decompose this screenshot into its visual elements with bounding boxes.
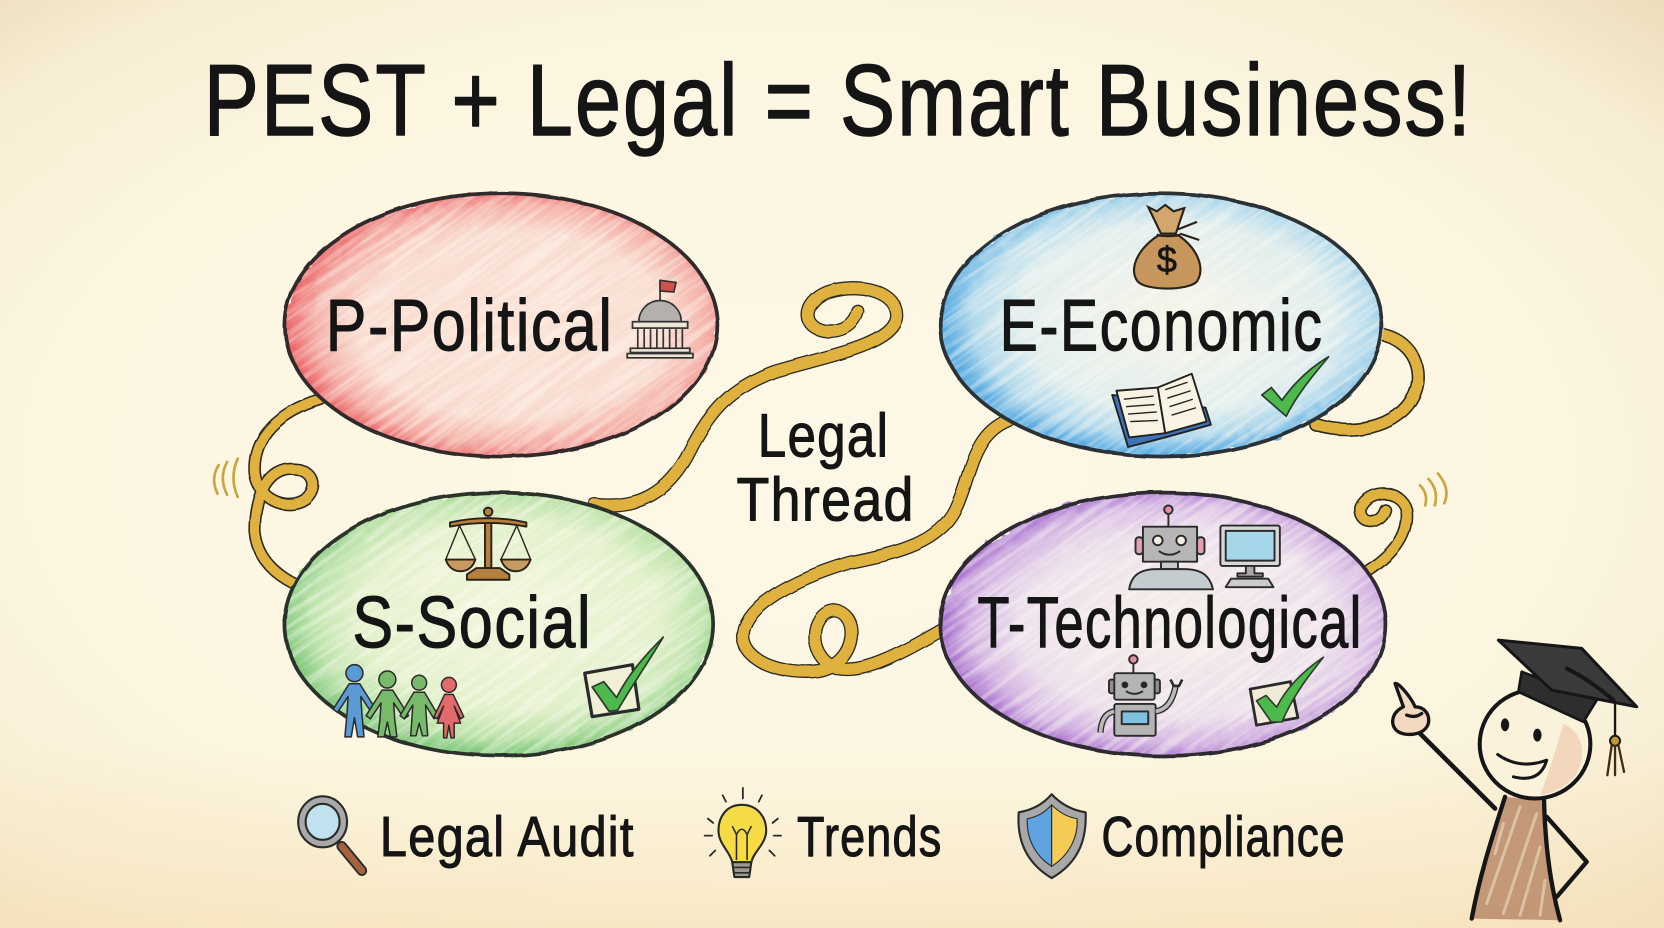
icon: group of people: [333, 665, 464, 738]
label: T-Technological: T-Technological: [977, 584, 1363, 664]
label: Legal Audit: Legal Audit: [380, 805, 635, 868]
icon: purple checkbox: [1250, 657, 1323, 725]
icon: check mark: [1262, 357, 1329, 416]
ribbon: technological curl: [1360, 493, 1406, 573]
icon: open book: [1112, 374, 1211, 447]
ribbon: economic loop: [1316, 334, 1418, 430]
icon: money bag: [1134, 205, 1200, 289]
legend: legal audit: [298, 796, 635, 871]
label: Compliance: Compliance: [1102, 805, 1346, 868]
label: P-Political: P-Political: [326, 284, 613, 366]
body: [1472, 797, 1587, 920]
legal thread ribbon: [255, 288, 1418, 672]
panel: political: [282, 190, 720, 459]
icon: magnifying glass: [298, 796, 362, 871]
icon: shield: [1018, 794, 1086, 878]
label: Trends: Trends: [797, 805, 942, 868]
legend: compliance: [1018, 794, 1346, 878]
label: Legal Thread: Legal: [758, 402, 889, 471]
face: [1498, 718, 1547, 778]
graduation cap: [1498, 640, 1637, 775]
legend: trends: [705, 788, 942, 877]
label: Legal Thread: Thread: [736, 465, 915, 534]
icon: light bulb: [705, 788, 781, 877]
icon: green checkbox: [585, 637, 663, 717]
icon: waving robot: [1100, 655, 1182, 736]
ribbon: social to curl near economic: [594, 288, 897, 505]
label: Legal Thread: [736, 402, 915, 534]
motion lines left: [214, 459, 238, 497]
label: S-Social: S-Social: [352, 582, 592, 664]
icon: government building: [627, 280, 693, 358]
icon: robot and shoulders: [1129, 505, 1213, 589]
ribbon: political to social: [255, 399, 320, 584]
panel: social: [282, 490, 715, 758]
ribbon: economic to technological: [743, 420, 1008, 672]
icon: computer monitor: [1220, 526, 1280, 587]
character: graduate pointing up: [1393, 640, 1637, 920]
icon: money bag: $: [1157, 239, 1178, 280]
label: E-Economic: E-Economic: [1000, 284, 1323, 366]
raised arm: [1420, 733, 1495, 809]
panel: economic: [938, 191, 1385, 460]
motion lines right: [1420, 474, 1446, 505]
icon: scales of justice: [446, 508, 531, 580]
head: [1480, 690, 1590, 799]
panel: technological: [938, 490, 1388, 758]
pointing hand: [1393, 683, 1429, 734]
